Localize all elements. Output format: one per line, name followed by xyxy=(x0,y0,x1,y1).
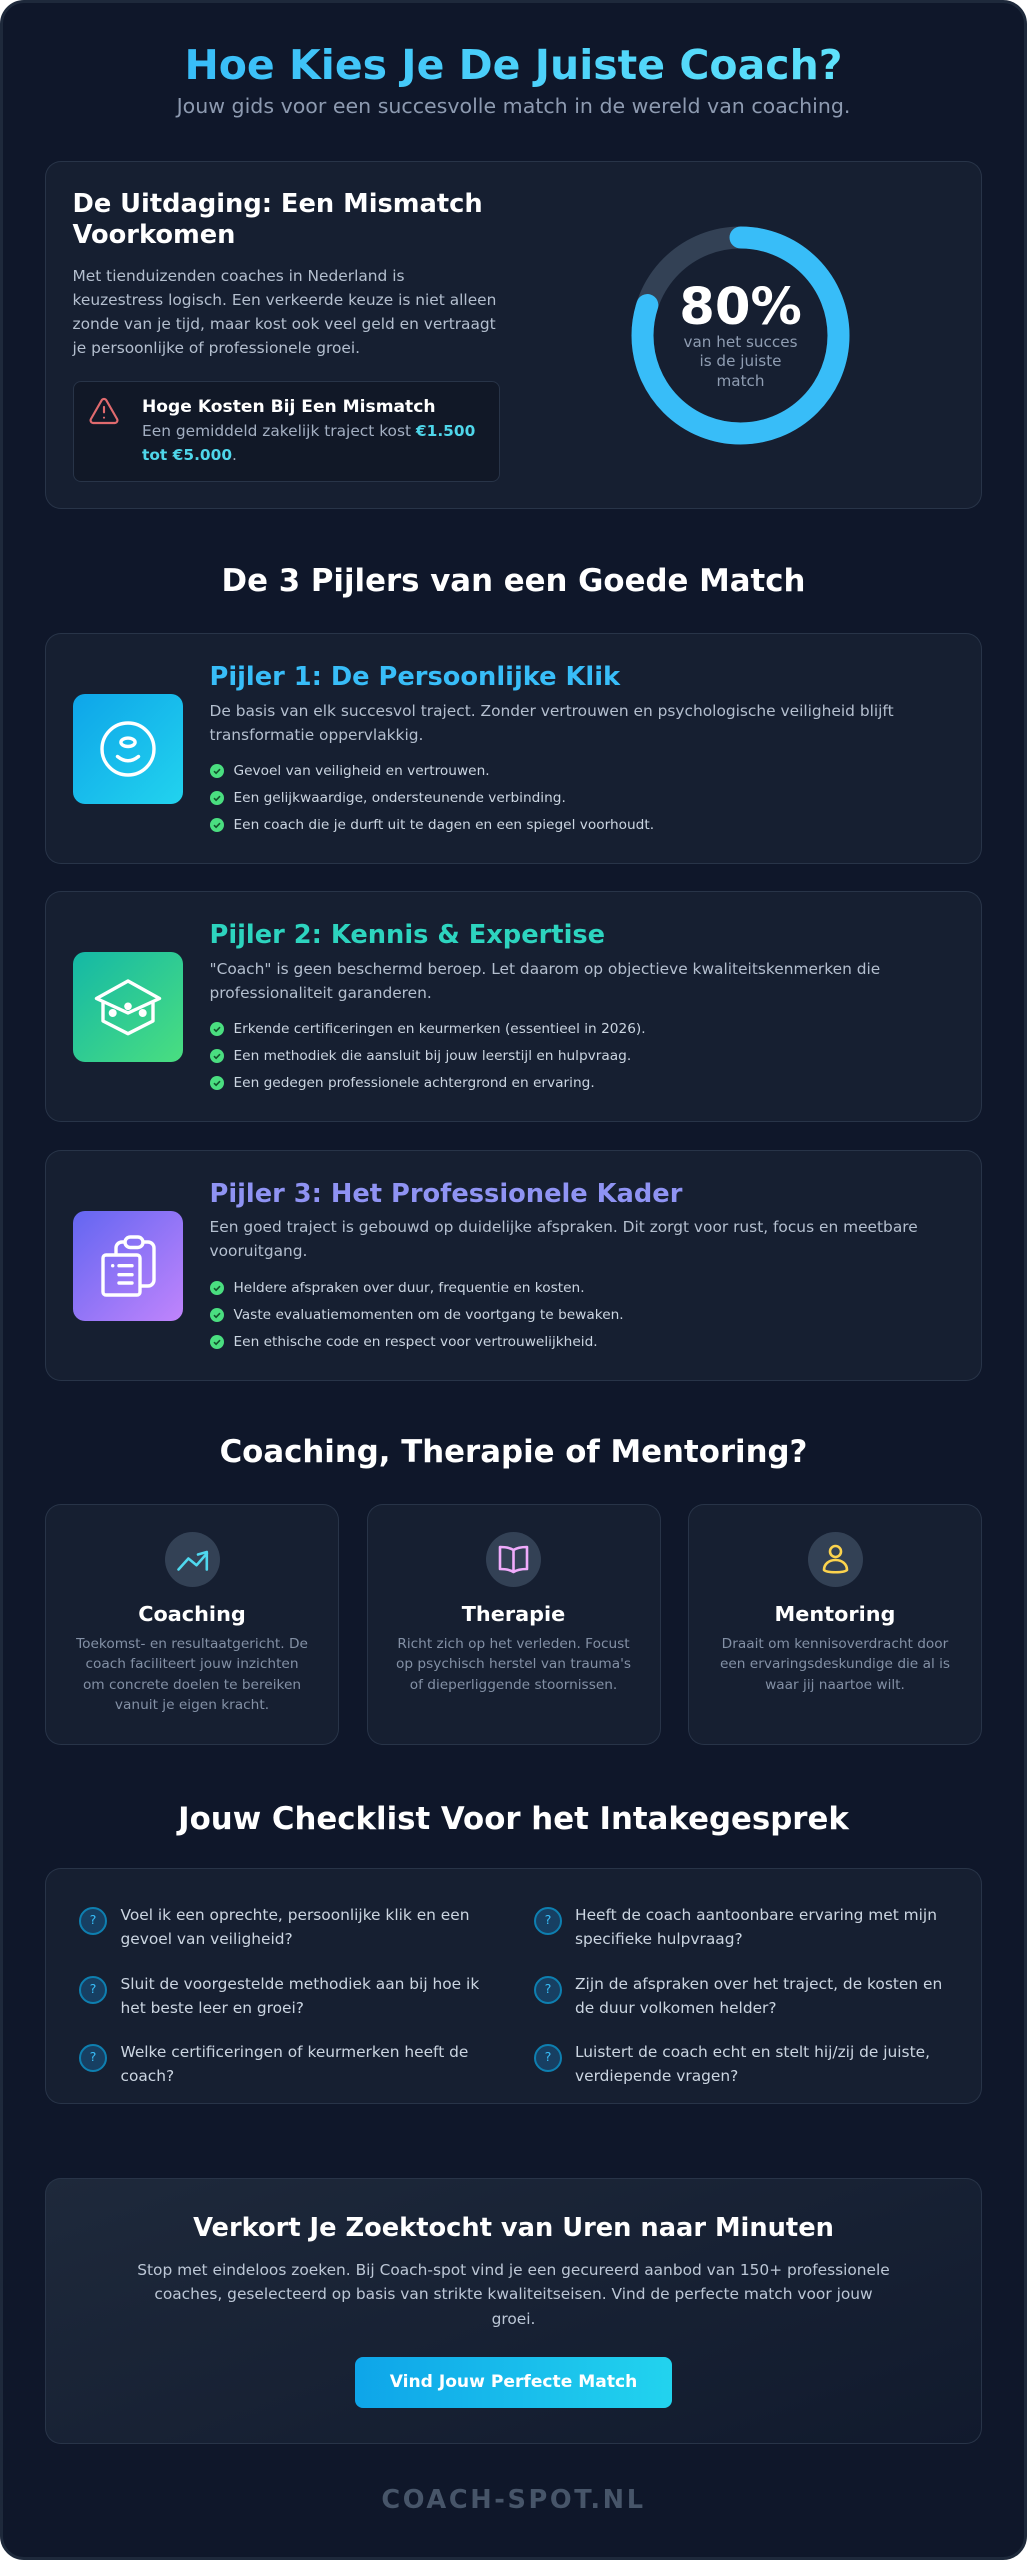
question icon xyxy=(79,1907,107,1935)
checklist items xyxy=(210,763,654,833)
card text xyxy=(396,1636,631,1693)
question icon: ? xyxy=(90,2050,96,2065)
list item: Een ethische code en respect voor vertrouwelijkheid. xyxy=(234,1334,598,1350)
question icon xyxy=(534,1907,562,1935)
cta text: Stop met eindeloos zoeken. Bij Coach-spot vind je een gecureerd aanbod van 150+ professionele xyxy=(137,2261,890,2279)
list item: Een methodiek die aansluit bij jouw leerstijl en hulpvraag. xyxy=(234,1048,631,1064)
card title: Therapie xyxy=(462,1602,565,1626)
card text xyxy=(76,1636,308,1713)
card text: vanuit je eigen kracht. xyxy=(115,1697,269,1713)
challenge heading: Voorkomen xyxy=(72,220,235,250)
list item: Gevoel van veiligheid en vertrouwen. xyxy=(234,763,490,779)
heading: checklist: Jouw Checklist Voor het Intakegesprek xyxy=(178,1801,849,1837)
pillar description xyxy=(210,1218,918,1260)
question: coach? xyxy=(120,2067,174,2085)
challenge text: keuzestress logisch. Een verkeerde keuze is niet alleen xyxy=(72,291,496,309)
question xyxy=(120,1974,480,2017)
icon: person xyxy=(808,1532,862,1587)
question: Heeft de coach aantoonbare ervaring met mijn xyxy=(575,1906,937,1924)
list item: Heldere afspraken over duur, frequentie en kosten. xyxy=(234,1280,585,1296)
icon: check xyxy=(210,1335,224,1349)
icon: open book xyxy=(486,1532,541,1587)
list item: Een gelijkwaardige, ondersteunende verbinding. xyxy=(234,790,566,806)
question icon: ? xyxy=(90,1982,96,1996)
pillar description: professionaliteit garanderen. xyxy=(210,984,432,1002)
icon: trending up xyxy=(164,1532,220,1587)
question: Sluit de voorgestelde methodiek aan bij hoe ik xyxy=(120,1974,479,1992)
card text: een ervaringsdeskundige die al is xyxy=(720,1656,950,1672)
checklist items xyxy=(210,1280,624,1350)
question icon: ? xyxy=(545,2050,551,2065)
subtitle: Jouw gids voor een succesvolle match in de wereld van coaching. xyxy=(177,94,850,118)
panel: de uitdaging xyxy=(45,161,982,509)
card text: waar jij naartoe wilt. xyxy=(765,1677,905,1693)
callout heading: Hoge Kosten Bij Een Mismatch xyxy=(142,397,436,417)
pillar description xyxy=(210,960,880,1002)
icon: check xyxy=(210,1076,224,1090)
panel: therapie xyxy=(366,1504,660,1745)
pillar description: "Coach" is geen beschermd beroep. Let daarom op objectieve kwaliteitskenmerken die xyxy=(210,960,880,978)
challenge heading xyxy=(72,189,483,250)
card title: Coaching xyxy=(138,1602,246,1626)
icon: check xyxy=(210,1281,224,1295)
cta heading: Verkort Je Zoektocht van Uren naar Minuten xyxy=(193,2213,834,2243)
heading: coaching therapie mentoring: Coaching, Therapie of Mentoring? xyxy=(220,1434,807,1470)
challenge text: Met tienduizenden coaches in Nederland is xyxy=(72,267,404,285)
question icon: ? xyxy=(90,1913,96,1928)
question: Luistert de coach echt en stelt hij/zij de juiste, xyxy=(575,2043,930,2061)
question: Voel ik een oprechte, persoonlijke klik en een xyxy=(120,1906,470,1924)
challenge heading: De Uitdaging: Een Mismatch xyxy=(72,189,483,219)
card text: Draait om kennisoverdracht door xyxy=(722,1636,948,1652)
card text: coach faciliteert jouw inzichten xyxy=(85,1656,299,1672)
question: de duur volkomen helder? xyxy=(575,1999,777,2017)
question xyxy=(120,2043,468,2085)
question icon xyxy=(534,1976,562,2004)
callout text xyxy=(142,422,475,464)
question: Welke certificeringen of keurmerken heeft de xyxy=(120,2043,468,2061)
donut caption xyxy=(684,332,798,390)
challenge text: je persoonlijke of professionele groei. xyxy=(72,339,360,357)
icon: clipboards xyxy=(72,1211,182,1321)
pillar description: De basis van elk succesvol traject. Zonder vertrouwen en psychologische veiligheid blijft xyxy=(210,702,894,720)
card title: Mentoring xyxy=(775,1602,895,1626)
cta text xyxy=(137,2261,890,2328)
question icon xyxy=(534,2044,562,2072)
pillar description xyxy=(210,702,894,744)
donut caption: van het succes xyxy=(684,332,798,350)
question: gevoel van veiligheid? xyxy=(120,1930,293,1948)
donut caption: is de juiste xyxy=(699,352,782,370)
cta text: groei. xyxy=(492,2310,535,2328)
question xyxy=(120,1906,470,1948)
icon: smiling face xyxy=(72,694,182,804)
pillar description: vooruitgang. xyxy=(210,1242,307,1260)
donut value: 80% xyxy=(679,276,802,336)
chart: 80 percent donut xyxy=(632,226,850,444)
cta button: Vind Jouw Perfecte Match xyxy=(390,2372,637,2392)
pillar title: Pijler 2: Kennis & Expertise xyxy=(210,920,605,950)
question icon xyxy=(79,2044,107,2072)
card text xyxy=(720,1636,950,1693)
panel: mentoring xyxy=(688,1504,982,1745)
question icon xyxy=(79,1976,107,2004)
icon: warning triangle xyxy=(90,398,118,424)
panel: pijler 2 xyxy=(45,891,982,1122)
panel: pijler 1 xyxy=(45,633,982,864)
question: verdiepende vragen? xyxy=(575,2067,738,2085)
card text: op psychisch herstel van trauma's xyxy=(396,1656,631,1672)
callout: hoge kosten xyxy=(72,380,500,482)
pillar title: Pijler 1: De Persoonlijke Klik xyxy=(210,662,620,692)
icon: check xyxy=(210,1022,224,1036)
icon: check xyxy=(210,791,224,805)
list item: Een gedegen professionele achtergrond en ervaring. xyxy=(234,1075,595,1091)
question: het beste leer en groei? xyxy=(120,1999,304,2017)
title: Hoe Kies Je De Juiste Coach? xyxy=(184,41,843,89)
question xyxy=(575,1974,942,2017)
icon: check xyxy=(210,1049,224,1063)
question: specifieke hulpvraag? xyxy=(575,1930,743,1948)
question icon: ? xyxy=(545,1982,551,1996)
list item: Vaste evaluatiemomenten om de voortgang te bewaken. xyxy=(234,1307,624,1323)
card text: Toekomst- en resultaatgericht. De xyxy=(76,1636,308,1652)
cta text: coaches, geselecteerd op basis van strikte kwaliteitseisen. Vind de perfecte match voor jouw xyxy=(154,2285,873,2303)
pillar description: transformatie oppervlakkig. xyxy=(210,726,423,744)
challenge text xyxy=(72,267,496,357)
callout text: tot €5.000. xyxy=(142,446,237,464)
checklist items xyxy=(210,1021,646,1091)
question xyxy=(575,1906,937,1948)
pillar description: Een goed traject is gebouwd op duidelijke afspraken. Dit zorgt voor rust, focus en meetbare xyxy=(210,1218,918,1236)
icon: check xyxy=(210,818,224,832)
cta button xyxy=(355,2357,672,2408)
list item: Erkende certificeringen en keurmerken (essentieel in 2026). xyxy=(234,1021,646,1037)
pillar title: Pijler 3: Het Professionele Kader xyxy=(210,1179,682,1209)
icon: graduation cap xyxy=(72,952,182,1062)
question: Zijn de afspraken over het traject, de kosten en xyxy=(575,1974,942,1992)
donut caption: match xyxy=(716,372,765,390)
heading: pijlers: De 3 Pijlers van een Goede Match xyxy=(222,563,805,599)
icon: check xyxy=(210,764,224,778)
card text: om concrete doelen te bereiken xyxy=(83,1677,301,1693)
panel: coaching xyxy=(45,1504,339,1745)
callout text: Een gemiddeld zakelijk traject kost €1.500 xyxy=(142,422,475,440)
challenge text: zonde van je tijd, maar kost ook veel geld en vertraagt xyxy=(72,315,496,333)
panel: call to action xyxy=(45,2178,982,2444)
list item: Een coach die je durft uit te dagen en een spiegel voorhoudt. xyxy=(234,817,654,833)
question icon: ? xyxy=(545,1913,551,1928)
card text: of dieperliggende stoornissen. xyxy=(410,1677,617,1693)
icon: check xyxy=(210,1308,224,1322)
question xyxy=(575,2043,930,2085)
panel: pijler 3 xyxy=(45,1150,982,1381)
footer brand: COACH-SPOT.NL xyxy=(381,2485,646,2515)
panel: checklist xyxy=(45,1868,982,2104)
card text: Richt zich op het verleden. Focust xyxy=(397,1636,630,1652)
